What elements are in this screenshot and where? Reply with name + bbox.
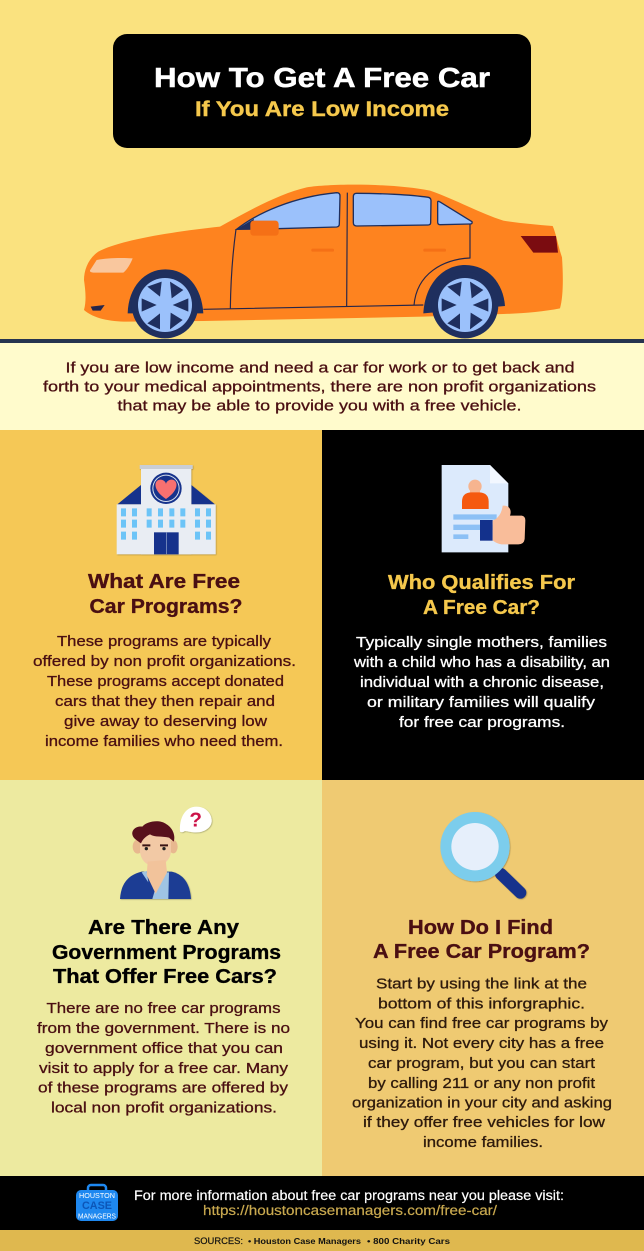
heading: That Offer Free Cars? bbox=[53, 966, 277, 988]
icon: magnifying glass bbox=[440, 812, 520, 893]
panel: who qualifies bbox=[322, 430, 644, 780]
icon: hospital building bbox=[117, 465, 216, 554]
heading: A Free Car Program? bbox=[373, 941, 590, 963]
title block bbox=[113, 34, 531, 148]
ground line bbox=[0, 339, 644, 343]
panel: how do I find bbox=[322, 780, 644, 1176]
body text: organization in your city and asking bbox=[352, 1094, 612, 1112]
body text: offered by non profit organizations. bbox=[33, 653, 296, 670]
illustration: orange car bbox=[84, 185, 563, 338]
rear window bbox=[353, 193, 431, 226]
panel: sources: • 800 Charity Cars bbox=[367, 1236, 450, 1246]
body text bbox=[37, 1000, 290, 1116]
panel: intro: that may be able to provide you with a free vehicle. bbox=[118, 398, 522, 414]
body text: You can find free car programs by bbox=[355, 1015, 609, 1032]
heading: How Do I Find bbox=[408, 917, 553, 939]
heading bbox=[373, 917, 590, 963]
panel: hero background bbox=[0, 0, 644, 340]
heading: Car Programs? bbox=[90, 596, 243, 618]
panel: intro: forth to your medical appointments, there are non profit organizations bbox=[43, 378, 596, 396]
heading: Government Programs bbox=[52, 942, 281, 964]
panel: intro bbox=[0, 343, 644, 430]
body text: income families who need them. bbox=[45, 733, 283, 750]
body text: using it. Not every city has a free bbox=[359, 1035, 604, 1052]
body text: cars that they then repair and bbox=[55, 693, 275, 710]
body text: from the government. There is no bbox=[37, 1020, 290, 1037]
body text: Typically single mothers, families bbox=[356, 634, 607, 651]
title: How To Get A Free Car bbox=[154, 62, 490, 93]
icon: Houston Case Managers logo: HOUSTON bbox=[79, 1191, 115, 1200]
body text: income families. bbox=[423, 1134, 543, 1151]
panel: intro: If you are low income and need a car for work or to get back and bbox=[66, 360, 574, 376]
subtitle: If You Are Low Income bbox=[195, 98, 449, 121]
icon: Houston Case Managers logo: MANAGERS bbox=[78, 1212, 116, 1220]
panel: government programs bbox=[0, 780, 322, 1176]
footer text: For more information about free car programs near you please visit: bbox=[134, 1188, 564, 1203]
body text: with a child who has a disability, an bbox=[353, 654, 610, 671]
body text: These programs are typically bbox=[57, 633, 272, 650]
body text: if they offer free vehicles for low bbox=[363, 1114, 605, 1131]
front wheel bbox=[128, 269, 203, 338]
body text: car program, but you can start bbox=[368, 1055, 596, 1072]
icon: Houston Case Managers logo bbox=[76, 1185, 118, 1221]
fog lamp bbox=[91, 305, 105, 311]
body text: give away to deserving low bbox=[64, 713, 267, 730]
panel: footer call to action bbox=[0, 1176, 644, 1230]
panel: sources bbox=[0, 1230, 644, 1251]
panel: what are free car programs bbox=[0, 430, 322, 780]
icon: Houston Case Managers logo: CASE bbox=[82, 1200, 112, 1212]
heading: Who Qualifies For bbox=[388, 572, 575, 594]
body text: by calling 211 or any non profit bbox=[368, 1075, 596, 1092]
handles bbox=[311, 249, 334, 252]
rear wheel bbox=[423, 265, 505, 338]
body text: These programs accept donated bbox=[47, 673, 284, 690]
body text: Start by using the link at the bbox=[376, 976, 587, 992]
door lines bbox=[203, 193, 470, 309]
body text bbox=[33, 633, 296, 750]
heading: What Are Free bbox=[88, 571, 240, 593]
heading bbox=[52, 917, 281, 988]
tail light bbox=[521, 236, 558, 253]
heading bbox=[88, 571, 243, 618]
heading: A Free Car? bbox=[423, 597, 540, 619]
body text: There are no free car programs bbox=[46, 1000, 280, 1017]
icon: thinking person: ? bbox=[189, 809, 202, 832]
body text: or military families will qualify bbox=[367, 694, 596, 711]
body text: visit to apply for a free car. Many bbox=[39, 1060, 289, 1077]
headlight bbox=[90, 258, 133, 273]
body text bbox=[353, 634, 610, 731]
heading bbox=[388, 572, 575, 619]
body text: local non profit organizations. bbox=[51, 1100, 277, 1116]
panel: sources: • Houston Case Managers bbox=[248, 1236, 361, 1246]
body text: of these programs are offered by bbox=[38, 1080, 289, 1096]
body text: for free car programs. bbox=[399, 714, 565, 731]
body text: government office that you can bbox=[45, 1040, 283, 1057]
front window bbox=[237, 193, 340, 229]
heading: Are There Any bbox=[88, 917, 240, 939]
body text bbox=[352, 976, 612, 1151]
link: https://houstoncasemanagers.com/free-car/ bbox=[203, 1203, 497, 1218]
body text: individual with a chronic disease, bbox=[360, 674, 604, 691]
body text: bottom of this inforgraphic. bbox=[378, 996, 585, 1012]
mirror bbox=[250, 221, 279, 236]
icon: document with thumbs up bbox=[442, 465, 525, 552]
panel: sources: SOURCES: bbox=[194, 1236, 243, 1247]
icon: thinking person bbox=[120, 807, 212, 899]
